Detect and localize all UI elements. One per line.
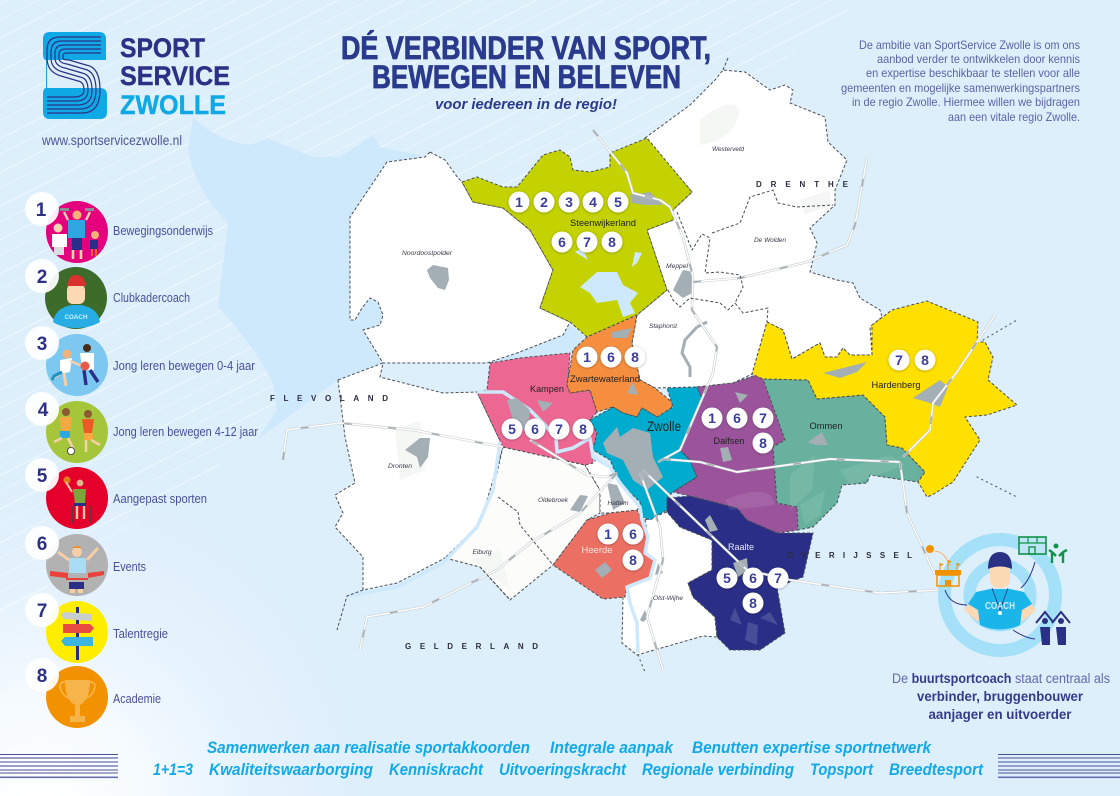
region: Dalfsen <box>673 373 798 533</box>
map of the region <box>270 58 1017 672</box>
legend item 6: Events <box>46 534 108 596</box>
number badges: Kampen: 5 <box>508 421 516 437</box>
legend <box>25 192 259 728</box>
municipality labels (partners): Hardenberg <box>872 380 920 391</box>
towns <box>405 192 948 622</box>
municipality labels (small): Olst-Wijhe <box>653 595 683 602</box>
municipality labels (small): Noordoostpolder <box>402 250 453 257</box>
municipality labels (partners): Zwolle <box>647 418 681 434</box>
intro text: en expertise beschikbaar te stellen voor alle <box>866 66 1080 80</box>
region: Zwolle <box>590 387 702 520</box>
province labels <box>270 180 912 651</box>
legend number 1 <box>25 192 59 226</box>
buurtsportcoach text: De buurtsportcoach staat centraal als <box>892 671 1110 686</box>
region: Westerveld, De Wolden, Meppel and Staphorst <box>632 70 882 388</box>
title <box>341 30 711 95</box>
number badges: Zwartewaterland <box>576 346 646 368</box>
logo <box>43 32 230 120</box>
number badges: Hardenberg: 8 <box>921 352 929 368</box>
keywords line 1 <box>207 738 932 757</box>
water: IJsselmeer <box>188 117 587 440</box>
province labels: GELDERLAND <box>405 642 538 651</box>
legend label 3: Jong leren bewegen 0-4 jaar <box>113 358 256 373</box>
legend number 4 <box>25 392 59 426</box>
icon: neighbourhood people <box>1036 612 1070 645</box>
number badges: Steenwijkerland: 2 <box>540 194 548 210</box>
legend number 6 <box>25 526 59 560</box>
municipality labels (small): Elburg <box>472 549 492 556</box>
municipality labels (partners): Raalte <box>728 542 754 553</box>
provincial dotted borders <box>638 320 1017 672</box>
intro text: in de regio Zwolle. Hiermee willen we bijdragen <box>852 95 1080 109</box>
legend item 7: Talentregie <box>46 601 108 663</box>
municipality labels (partners): Steenwijkerland <box>570 218 636 229</box>
region: Dronten <box>335 363 503 590</box>
keywords line 2: Kwaliteitswaarborging <box>209 760 374 779</box>
region: Zwartewaterland <box>567 315 673 417</box>
number badges: Raalte: 7 <box>774 570 782 586</box>
keywords line 1: Benutten expertise sportnetwerk <box>692 738 932 757</box>
legend label 2: Clubkadercoach <box>113 290 190 305</box>
legend label 8: Academie <box>113 691 161 706</box>
legend label 5: Aangepast sporten <box>113 491 207 506</box>
municipality labels (small): Staphorst <box>649 323 678 330</box>
legend item 4: Jong leren bewegen 4-12 jaar <box>46 401 108 463</box>
keywords line 1: Samenwerken aan realisatie sportakkoorden <box>207 738 530 757</box>
legend number 8 <box>25 658 59 692</box>
logo wordmark: ZWOLLE <box>120 90 226 120</box>
number badges: Raalte: 6 <box>749 570 757 586</box>
number badges: Steenwijkerland: 4 <box>589 194 597 210</box>
roads <box>283 130 995 670</box>
number badges: Kampen: 6 <box>531 421 539 437</box>
legend number 3: 3 <box>37 334 47 355</box>
number badges: Heerde: 6 <box>629 526 637 542</box>
number badges: Heerde <box>598 524 644 570</box>
legend number 7 <box>25 593 59 627</box>
keywords line 1: Integrale aanpak <box>550 738 674 757</box>
legend item 3: Jong leren bewegen 0-4 jaar <box>46 334 108 396</box>
legend number 5 <box>25 458 59 492</box>
buurtsportcoach text <box>892 671 1110 722</box>
footer stripes left <box>0 754 118 778</box>
intro text <box>841 38 1080 124</box>
legend label 4: Jong leren bewegen 4-12 jaar <box>113 424 259 439</box>
municipality labels (small): Meppel <box>666 263 689 270</box>
keywords line 2 <box>153 760 984 779</box>
municipality labels (partners): Kampen <box>530 384 564 395</box>
keywords line 2: 1+1=3 <box>153 760 193 779</box>
legend label 7: Talentregie <box>113 626 168 641</box>
region: Hattem <box>585 460 640 513</box>
keywords line 2: Breedtesport <box>889 760 984 779</box>
lakes in Steenwijkerland <box>575 248 642 317</box>
number badges: Dalfsen: 1 <box>708 410 716 426</box>
legend number 7: 7 <box>37 601 47 622</box>
legend number 2: 2 <box>37 267 47 288</box>
number badges: Dalfsen: 8 <box>759 435 767 451</box>
number badges: Steenwijkerland <box>508 192 628 252</box>
number badges: Zwartewaterland: 6 <box>607 349 615 365</box>
number badges: Raalte: 5 <box>723 570 731 586</box>
number badges: Steenwijkerland: 1 <box>515 194 523 210</box>
number badges: Kampen: 8 <box>579 421 587 437</box>
buurtsportcoach text: verbinder, bruggenbouwer <box>917 689 1084 704</box>
region: Noordoostpolder <box>350 152 570 363</box>
municipality labels (small): Oldebroek <box>538 497 569 504</box>
intro text: gemeenten en mogelijke samenwerkingspartners <box>841 81 1080 95</box>
coach figure: COACH <box>985 601 1015 612</box>
number badges: Steenwijkerland: 3 <box>565 194 573 210</box>
province labels: DRENTHE <box>756 180 849 189</box>
terrain tints <box>395 104 905 645</box>
intro text: De ambitie van SportService Zwolle is om ons <box>859 38 1080 52</box>
website: www.sportservicezwolle.nl <box>41 132 182 148</box>
concentric rings <box>944 540 1056 650</box>
municipality labels (partners): Dalfsen <box>714 436 744 447</box>
keywords line 2: Topsport <box>810 760 874 779</box>
legend item 5: Aangepast sporten <box>46 467 108 529</box>
municipality labels (partners): Ommen <box>810 421 842 432</box>
number badges: Hardenberg: 7 <box>895 352 903 368</box>
legend item 2: Clubkadercoach <box>45 267 107 329</box>
keywords line 2: Uitvoeringskracht <box>499 760 627 779</box>
buurtsportcoach text: aanjager en uitvoerder <box>928 707 1072 722</box>
number badges: Dalfsen <box>702 408 774 454</box>
connecting lines <box>945 562 1035 639</box>
keywords line 2: Kenniskracht <box>389 760 484 779</box>
number badges: Raalte <box>716 568 788 614</box>
legend number 2 <box>25 259 59 293</box>
river IJssel <box>477 392 655 653</box>
region: Ommen <box>763 379 925 530</box>
intro text: aan een vitale regio Zwolle. <box>948 110 1080 124</box>
number badges: Hardenberg <box>888 350 936 370</box>
municipality labels (partners) <box>530 218 920 556</box>
legend number 1: 1 <box>36 200 47 221</box>
province labels: FLEVOLAND <box>270 394 388 403</box>
number badges: Steenwijkerland: 8 <box>608 234 616 250</box>
municipality labels (small): De Wolden <box>754 237 786 244</box>
number badges: Kampen <box>502 418 594 440</box>
footer stripes right <box>998 754 1120 778</box>
number badges: Steenwijkerland: 6 <box>558 234 566 250</box>
legend label 1: Bewegingsonderwijs <box>113 223 213 238</box>
legend number 5: 5 <box>37 466 48 487</box>
number badges: Dalfsen: 6 <box>733 410 741 426</box>
number badges: Heerde: 1 <box>604 526 612 542</box>
intro text: aanbod verder te ontwikkelen door kennis <box>877 52 1080 66</box>
region: Olst-Wijhe <box>622 512 717 655</box>
legend label 6: Events <box>113 559 146 574</box>
legend item 1: Bewegingsonderwijs <box>46 201 108 263</box>
region: Raalte <box>667 496 813 650</box>
legend number 6: 6 <box>37 534 47 555</box>
number badges: Heerde: 8 <box>629 552 637 568</box>
region: Kampen <box>477 353 597 465</box>
title: DÉ VERBINDER VAN SPORT, <box>341 30 711 66</box>
logo wordmark: SERVICE <box>120 61 230 91</box>
buurtsportcoach illustration <box>926 537 1070 650</box>
region: Steenwijkerland <box>462 138 692 337</box>
number badges: Steenwijkerland: 5 <box>614 194 622 210</box>
number badges: Dalfsen: 7 <box>759 410 767 426</box>
legend number 4: 4 <box>38 400 49 421</box>
legend number 8: 8 <box>37 666 47 687</box>
coach figure <box>964 552 1036 630</box>
municipal borders inside Drenthe and Gelderland <box>337 58 833 630</box>
icon: sports club <box>926 545 961 586</box>
keywords line 2: Regionale verbinding <box>642 760 795 779</box>
legend item 8: Academie <box>46 666 108 728</box>
municipality labels (small): Dronten <box>388 463 412 470</box>
province labels: OVERIJSSEL <box>787 551 912 560</box>
legend number 3 <box>25 326 59 360</box>
number badges: Raalte: 8 <box>749 595 757 611</box>
municipality labels (partners): Zwartewaterland <box>570 374 640 385</box>
logo mark <box>43 32 107 119</box>
municipality labels (small) <box>388 146 786 602</box>
river along Flevoland <box>347 442 500 596</box>
number badges: Zwartewaterland: 1 <box>583 349 591 365</box>
legend item 2: Clubkadercoach: COACH <box>64 314 88 321</box>
number badges: Kampen: 7 <box>555 421 563 437</box>
region: Oldebroek and Elburg <box>445 447 600 600</box>
municipality labels (small): Westerveld <box>712 146 744 153</box>
logo wordmark: SPORT <box>120 33 205 63</box>
number badges: Steenwijkerland: 7 <box>583 234 591 250</box>
number badges: Zwartewaterland: 8 <box>631 349 639 365</box>
subtitle: voor iedereen in de regio! <box>435 96 617 113</box>
municipality labels (small): Hattem <box>608 500 629 507</box>
region: Heerde <box>553 510 655 599</box>
logo wordmark <box>120 33 230 120</box>
title: BEWEGEN EN BELEVEN <box>372 59 681 95</box>
municipality labels (partners): Heerde <box>582 545 612 556</box>
icon: school and children <box>1019 537 1067 563</box>
region: Hardenberg <box>752 301 1017 497</box>
